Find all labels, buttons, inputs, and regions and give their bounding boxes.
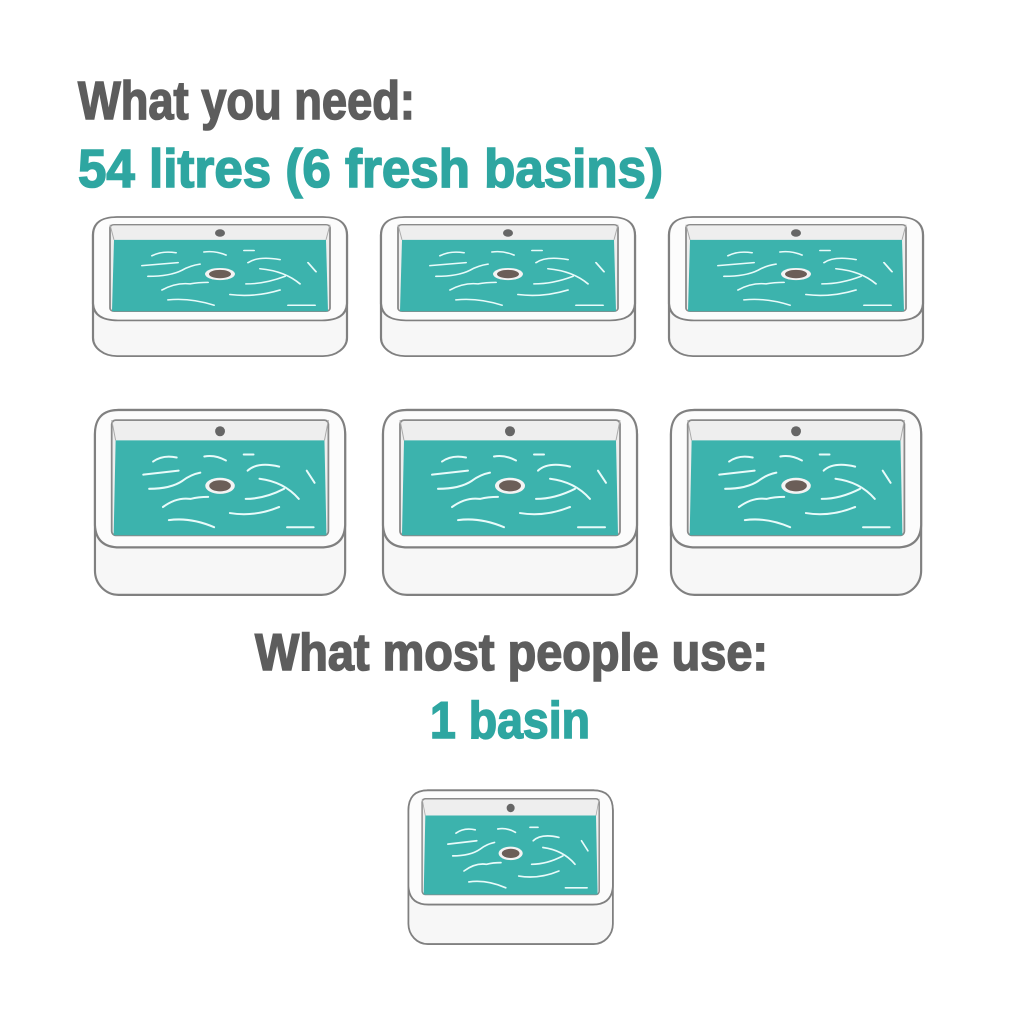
basin 6 xyxy=(671,410,921,595)
basin 1 xyxy=(93,217,347,356)
basin 4 xyxy=(95,410,345,595)
basin 2 xyxy=(381,217,635,356)
basin 3 xyxy=(669,217,923,356)
basin 5 xyxy=(383,410,637,595)
basin grid: 6 fresh basins xyxy=(93,217,923,595)
single basin xyxy=(408,790,613,944)
subtitle: 54 litres: 54 litres (6 fresh basins) xyxy=(78,139,663,199)
heading: what most people use: What most people use: xyxy=(255,624,768,682)
subheading: 1 basin: 1 basin xyxy=(430,692,590,750)
title: what you need: What you need: xyxy=(78,71,415,131)
